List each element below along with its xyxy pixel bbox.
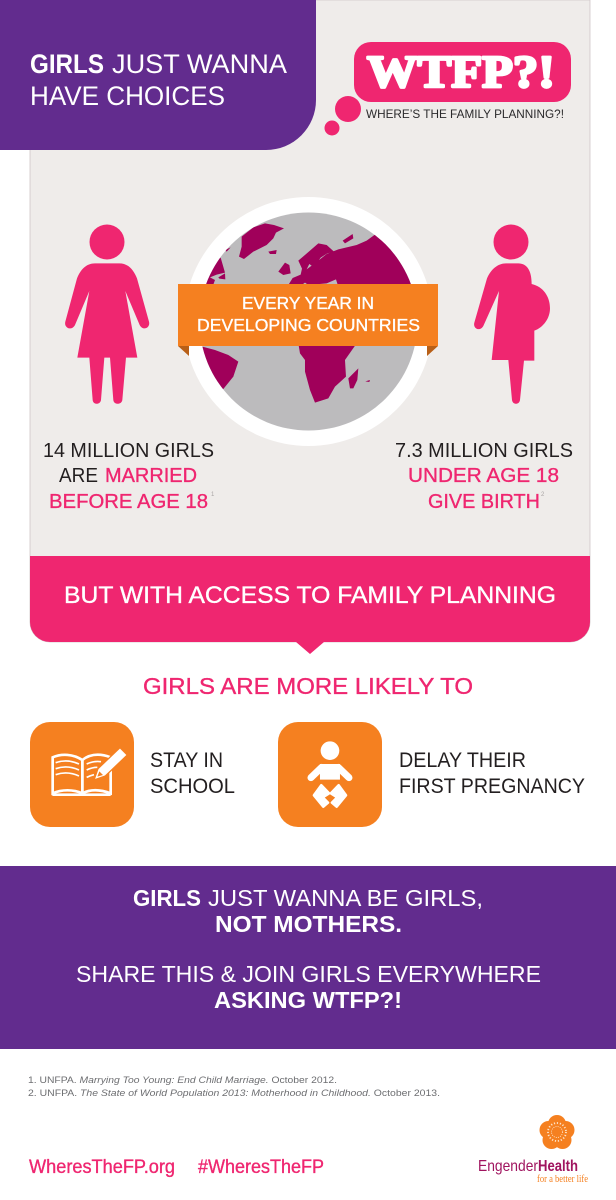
- EngenderHealth logo: Health: [538, 1158, 578, 1175]
- delay first pregnancy text: FIRST PREGNANCY: [399, 775, 585, 798]
- delay first pregnancy text: DELAY THEIR: [399, 749, 526, 772]
- footnotes: 2. UNFPA. The State of World Population 2013: Motherhood in Childhood. October 2013.: [28, 1088, 440, 1098]
- icon: pregnant girl figure: [474, 224, 550, 404]
- right statistic: GIVE BIRTH: [428, 490, 540, 513]
- left statistic: ARE: [59, 464, 98, 487]
- title panel: [0, 0, 316, 150]
- purple call to action panel: ASKING WTFP?!: [214, 987, 402, 1013]
- orange ribbon: [178, 284, 438, 346]
- purple call to action panel: NOT MOTHERS.: [215, 911, 402, 937]
- heading: girls are more likely to: GIRLS ARE MORE LIKELY TO: [143, 673, 473, 699]
- purple title tab: [0, 0, 316, 150]
- purple call to action panel: [0, 866, 616, 1049]
- icon: baby: [278, 722, 382, 827]
- website and hashtag links: #WheresTheFP: [198, 1157, 324, 1178]
- title text: HAVE CHOICES: [30, 81, 225, 111]
- right statistic: UNDER AGE 18: [408, 464, 559, 487]
- left statistic: 1: [211, 492, 215, 498]
- panel: grey background card: [30, 0, 590, 642]
- stay in school text: [150, 749, 235, 798]
- WTFP logo speech bubble: [324, 42, 571, 136]
- purple call to action panel: JUST WANNA BE GIRLS,: [208, 885, 483, 911]
- globe with ribbon: [178, 197, 438, 446]
- ribbon text: DEVELOPING COUNTRIES: [197, 315, 420, 335]
- pink banner: [30, 556, 590, 654]
- EngenderHealth logo: for a better life: [537, 1173, 588, 1185]
- left statistic: 14 MILLION GIRLS: [43, 439, 214, 462]
- icon: girl figure: [65, 224, 149, 404]
- icon: book and pencil: [30, 722, 134, 827]
- right statistic: 7.3 MILLION GIRLS: [395, 439, 573, 462]
- globe white ring: [184, 197, 433, 446]
- website and hashtag links: WheresTheFP.org: [29, 1157, 175, 1178]
- delay first pregnancy text: [399, 749, 585, 798]
- right statistic: [395, 439, 573, 513]
- purple call to action panel: GIRLS: [133, 885, 201, 911]
- ribbon text: EVERY YEAR IN: [242, 293, 374, 313]
- globe: [200, 212, 418, 430]
- title text: GIRLS: [30, 49, 104, 79]
- ribbon folds: [178, 346, 438, 356]
- stay in school text: SCHOOL: [150, 775, 235, 798]
- footnotes: [28, 1075, 440, 1098]
- website and hashtag links: [29, 1157, 324, 1178]
- EngenderHealth logo: [478, 1115, 588, 1185]
- right statistic: 2: [541, 492, 545, 498]
- pink banner: BUT WITH ACCESS TO FAMILY PLANNING: [64, 582, 556, 609]
- icon: orange flower: [540, 1115, 574, 1149]
- title text: [30, 49, 287, 111]
- WTFP logo speech bubble: WHERE’S THE FAMILY PLANNING?!: [366, 107, 564, 121]
- left statistic: BEFORE AGE 18: [49, 490, 208, 513]
- continents: [202, 223, 411, 403]
- stay in school text: STAY IN: [150, 749, 223, 772]
- ribbon text: [197, 293, 420, 335]
- left statistic: MARRIED: [105, 464, 197, 487]
- title text: JUST WANNA: [112, 49, 287, 79]
- WTFP logo speech bubble: WTFP?!: [367, 46, 555, 97]
- footnotes: 1. UNFPA. Marrying Too Young: End Child Marriage. October 2012.: [28, 1075, 337, 1085]
- EngenderHealth logo: Engender: [478, 1158, 539, 1175]
- left statistic: [43, 439, 215, 513]
- purple call to action panel: SHARE THIS & JOIN GIRLS EVERYWHERE: [76, 961, 541, 987]
